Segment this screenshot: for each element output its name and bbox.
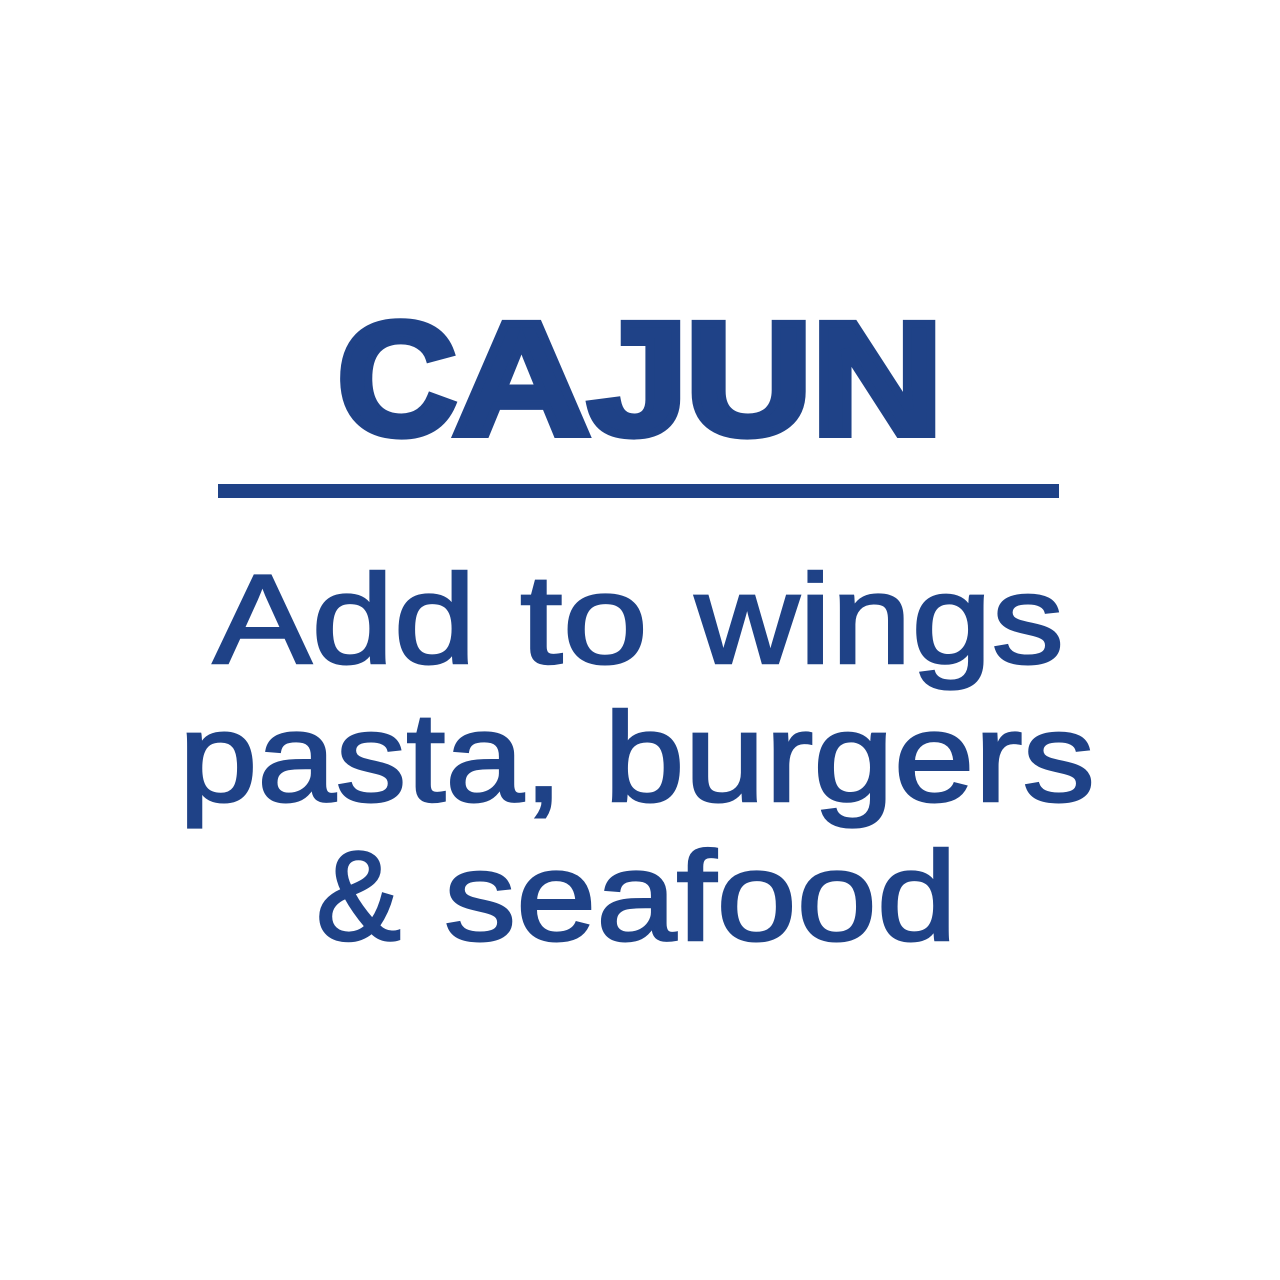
title: CAJUN: A (453, 289, 590, 468)
title: CAJUN: N (812, 289, 943, 468)
line 3: & (316, 825, 401, 967)
line 1 (213, 548, 1064, 690)
title: CAJUN: C (338, 289, 456, 468)
line 1: Add (213, 548, 476, 690)
line 2: pasta, (179, 686, 563, 828)
title: CAJUN (338, 289, 943, 468)
line 1: wings (694, 548, 1064, 690)
line 3: seafood (444, 825, 957, 967)
divider rule (218, 484, 1059, 498)
title: CAJUN: U (686, 289, 812, 468)
line 2 (179, 686, 1095, 828)
description text (179, 548, 1095, 967)
line 2: burgers (604, 686, 1095, 828)
title: CAJUN: J (588, 289, 688, 468)
line 1: to (520, 548, 648, 690)
